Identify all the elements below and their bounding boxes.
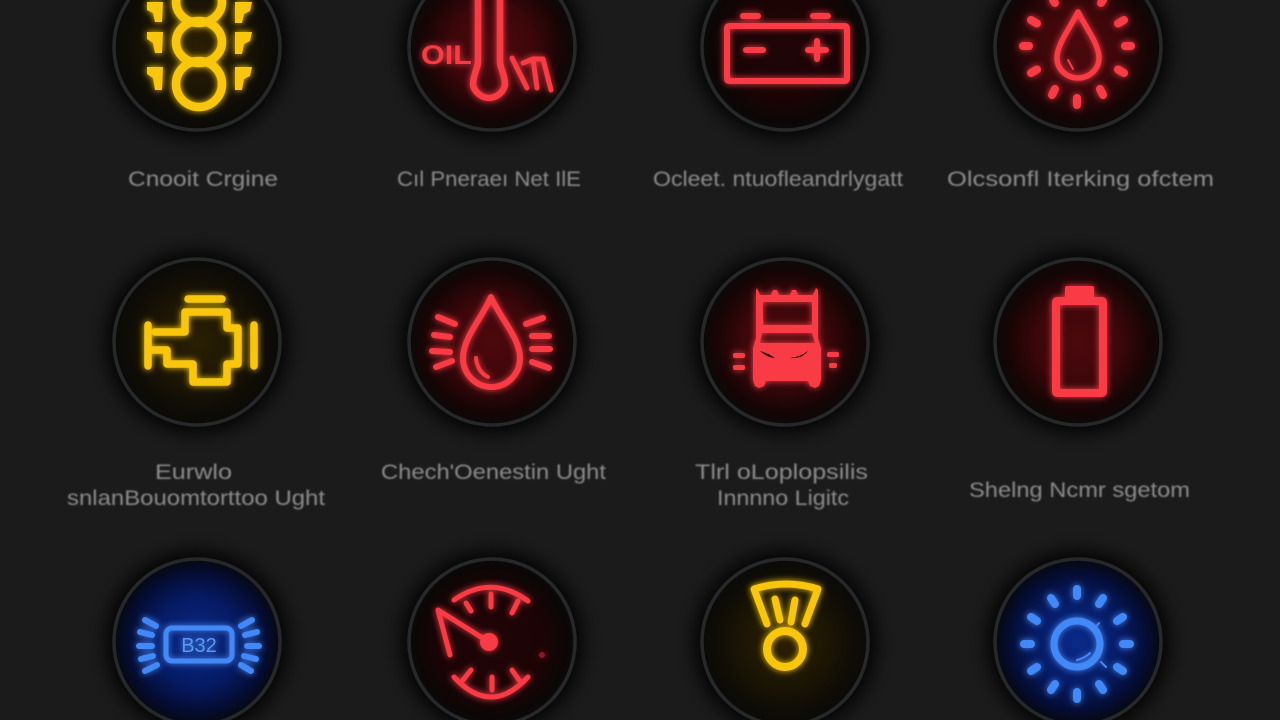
label: Innnno Ligitc xyxy=(717,487,849,510)
label xyxy=(695,461,868,510)
panel: row 1 column 4 coolant drop light xyxy=(947,0,1214,191)
icon: check engine xyxy=(148,299,254,382)
label: Chech'Oenestin Ught xyxy=(381,461,606,484)
label: Olcsonfl Iterking ofctem xyxy=(947,168,1214,191)
icon: sun ring with rays xyxy=(1024,589,1130,699)
panel: row 2 column 4 tall battery light xyxy=(969,252,1190,502)
label: snlanBouomtorttoo Ught xyxy=(67,487,325,510)
panel: row 2 column 1 engine light xyxy=(67,252,325,510)
icon: truck front xyxy=(733,288,839,388)
panel: row 1 column 2 oil light xyxy=(397,0,582,191)
icon: drop with side rays xyxy=(432,297,550,387)
icon: tall battery xyxy=(1056,286,1103,393)
label: Cıl Pneraeı Net IlE xyxy=(397,168,581,191)
icon: three stacked rings xyxy=(147,0,252,107)
panel: row 1 column 1 yellow light xyxy=(107,0,287,191)
panel: row 3 column 3 yellow wiper light xyxy=(695,552,875,720)
icon: fan and ring xyxy=(754,584,818,667)
label: Ocleet. ntuofleandrlygatt xyxy=(653,168,903,191)
icon: car battery xyxy=(727,16,847,81)
label: Tlrl oLoplopsilis xyxy=(695,461,868,484)
label: Cnooit Crgine xyxy=(128,168,278,191)
icon: drop with rays xyxy=(1023,0,1131,105)
panel: row 2 column 2 drop light xyxy=(381,252,606,484)
icon: oil thermometer: OIL xyxy=(421,40,472,70)
label: Shelng Ncmr sgetom xyxy=(969,479,1190,502)
panel: row 1 column 3 battery light xyxy=(653,0,903,191)
panel: row 3 column 4 blue light xyxy=(988,552,1168,720)
icon: oil thermometer xyxy=(421,0,551,98)
panel: row 2 column 3 truck light xyxy=(695,252,875,510)
panel: row 3 column 1 blue display light xyxy=(107,552,287,720)
label: Eurwlo xyxy=(155,461,232,484)
icon: gauge with needle xyxy=(438,587,545,697)
label xyxy=(67,461,325,510)
icon: display with rays xyxy=(139,620,259,671)
icon: display with rays: B32 xyxy=(181,635,217,657)
panel: row 3 column 2 gauge light xyxy=(402,552,582,720)
